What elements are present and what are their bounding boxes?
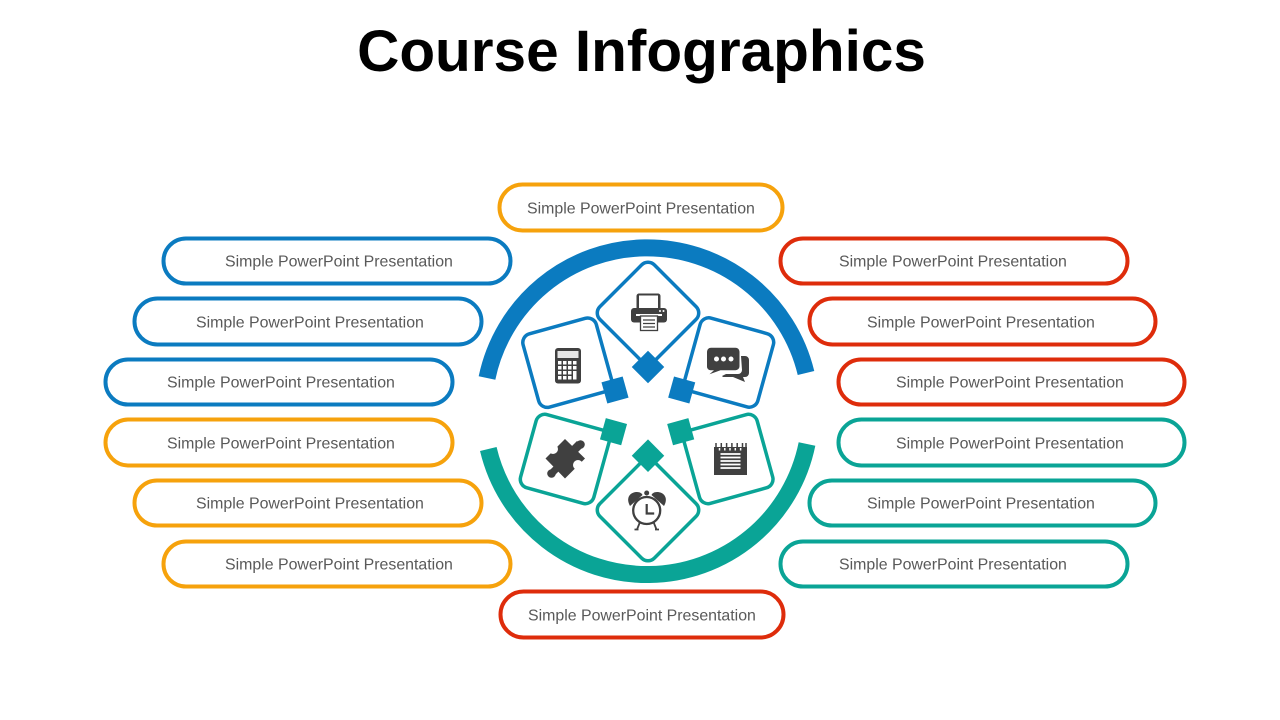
- pill: red 1: [780, 238, 1128, 284]
- pill: orange 2: [134, 480, 482, 526]
- icon: puzzle piece: [546, 439, 585, 478]
- title: Course Infographics: [357, 19, 926, 84]
- pill: blue 3: [106, 360, 452, 404]
- icon: calculator: [555, 348, 581, 384]
- pill: bottom red: [500, 592, 784, 638]
- pill: teal 2: [810, 480, 1156, 526]
- card: calculator: [521, 316, 629, 409]
- pill: teal 1: Simple PowerPoint Presentation: [896, 436, 1124, 452]
- card: alarm clock: [594, 439, 702, 564]
- pill: blue 2: [134, 298, 482, 344]
- icon: printer: [631, 294, 667, 330]
- pill: red 2: [810, 298, 1156, 344]
- pill: blue 3: Simple PowerPoint Presentation: [167, 374, 395, 392]
- pill: orange 1: Simple PowerPoint Presentation: [167, 436, 395, 452]
- arc: teal bottom: [488, 444, 807, 575]
- pill: orange 3: [164, 542, 510, 586]
- pill: orange 2: Simple PowerPoint Presentation: [196, 496, 424, 512]
- pill: top orange: Simple PowerPoint Presentation: [527, 200, 755, 218]
- card: chat: [668, 316, 776, 409]
- pill: blue 2: Simple PowerPoint Presentation: [196, 314, 424, 332]
- pill: teal 3: Simple PowerPoint Presentation: [839, 556, 1067, 574]
- pill: top orange: [500, 184, 782, 230]
- icon: alarm clock: [628, 490, 666, 530]
- icon: notepad: [714, 443, 747, 475]
- pill: red 2: Simple PowerPoint Presentation: [867, 314, 1095, 332]
- arc: blue top: [487, 248, 806, 378]
- pill: red 3: [838, 360, 1184, 404]
- pill: blue 1: [164, 238, 510, 284]
- pill: orange 3: Simple PowerPoint Presentation: [225, 556, 453, 574]
- pill: bottom red: Simple PowerPoint Presentation: [528, 608, 756, 624]
- icon: chat bubbles: [707, 348, 749, 382]
- pill: teal 1: [838, 420, 1184, 466]
- pill: red 3: Simple PowerPoint Presentation: [896, 374, 1124, 392]
- pill: red 1: Simple PowerPoint Presentation: [839, 254, 1067, 270]
- card: notepad: [667, 412, 775, 506]
- card: printer: [594, 259, 702, 383]
- card: puzzle: [518, 412, 627, 506]
- pill: blue 1: Simple PowerPoint Presentation: [225, 254, 453, 270]
- pill: teal 3: [780, 542, 1128, 586]
- pill: teal 2: Simple PowerPoint Presentation: [867, 496, 1095, 512]
- pill: orange 1: [106, 420, 452, 466]
